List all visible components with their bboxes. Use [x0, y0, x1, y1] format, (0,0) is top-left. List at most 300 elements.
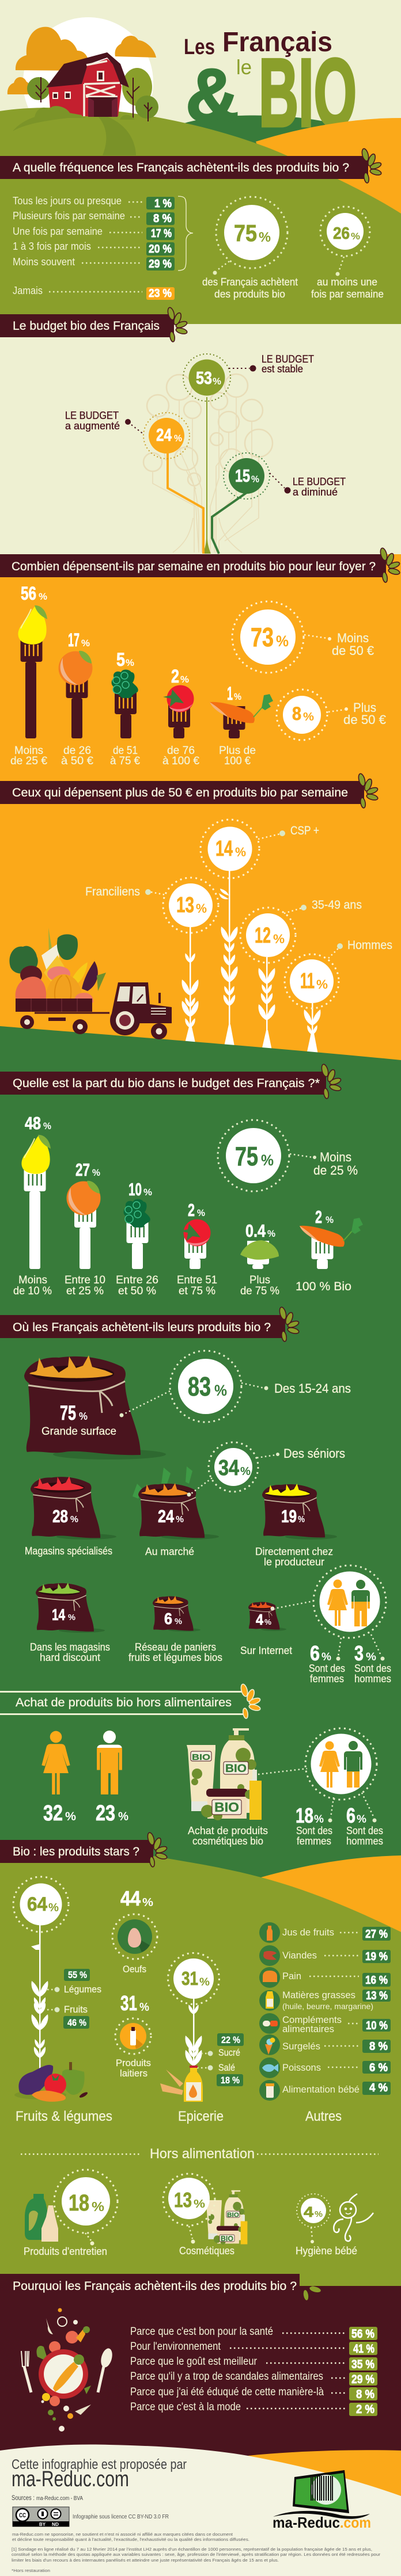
fork chart: over 75 percent: de 75 % [240, 1285, 279, 1297]
stat: cosmetics 13 percent: BIO [221, 2234, 233, 2243]
stat: grocery 31 percent [160, 1953, 244, 2124]
stat: 26 percent weekly: 26 [333, 224, 350, 243]
license badge: BY [39, 2522, 46, 2527]
stat: dairy 31 percent: laitiers [120, 2068, 147, 2079]
sack: direct from producer 19 percent: 19 [281, 1506, 297, 1526]
title: & [186, 53, 239, 137]
frequency list: Jamais [13, 285, 43, 296]
stat: internet buyers by gender: 3 [354, 1641, 364, 1665]
fork chart: 51 to 75 percent: % [197, 1207, 205, 1218]
license badge: ND [52, 2522, 59, 2527]
heading banner: frequency: A quelle fréquence les Français achètent-ils des produits bio ? [13, 161, 349, 174]
fork chart: over 75 percent: 0.4 [245, 1221, 266, 1241]
list: other products: (huile, beurre, margarine) [282, 2002, 373, 2011]
panel: weekly spend [0, 547, 400, 767]
frequency list: Moins souvent [13, 256, 75, 268]
stat: baby hygiene 4 percent: Hygiène bébé [296, 2245, 357, 2257]
stat: 8 percent over 50 euros: % [303, 711, 314, 723]
heading banner: weekly spend: Combien dépensent-ils par semaine en produits bio pour leur foyer ? [12, 560, 376, 573]
list: other products [259, 1922, 391, 2124]
list: reasons with percentages: Parce que c'est bon pour la santé [130, 2325, 273, 2338]
background: olive section [0, 1850, 401, 2286]
stat: fruits and vegetables 64 percent: 55 % [68, 1969, 87, 1980]
stat: 75 percent buy organic: % [259, 230, 271, 245]
fork chart: 26 to 50 euros: % [81, 638, 90, 649]
stat: grocery 31 percent: Epicerie [178, 2109, 224, 2124]
sack: supermarket 75 percent [24, 1355, 166, 1460]
fork chart: 76 to 100 euros: de 76 [167, 745, 195, 757]
stat: 13 percent Franciliens [85, 878, 218, 933]
heading banner: weekly spend [0, 547, 400, 583]
fork chart: 100 percent organic: 2 [315, 1207, 322, 1227]
disclaimer and sources: ma-Reduc.com ne sponsorise, ne soutient et n'est ni associé ni affilié aux marques citées dans ce document [12, 2532, 233, 2537]
stat: cosmetics buyers by gender: 18 [296, 1804, 313, 1827]
background: footer orange wedge [248, 2450, 401, 2501]
header illustration backdrop [7, 17, 156, 147]
fork chart: 10 to 25 percent: et 25 % [66, 1285, 104, 1297]
stat: 12 percent age 35-49 [240, 898, 362, 963]
fork chart: under 10 percent: de 10 % [13, 1285, 52, 1297]
list: other products: 16 % [365, 1974, 388, 1987]
stat: 83 percent age 15-24: Des 15-24 ans [274, 1381, 351, 1396]
illustration: organic cosmetics: BIO [192, 1752, 210, 1762]
title: le [236, 55, 252, 79]
stat: 24 percent increased: 24 [156, 425, 172, 445]
disclaimer and sources: [1] Sondage en ligne réalisé du 7 au 12 février 2014 par l'institut LH2 auprès d'un échantillon de 1000 personnes, représentatif de la population française âgée de 15 ans et plus, [12, 2547, 372, 2552]
stat: 15 percent decreased: % [251, 474, 259, 485]
fork chart: 51 to 75 percent: 2 [188, 1200, 195, 1220]
stat: 83 percent age 15-24: % [214, 1382, 227, 1399]
credit text: Sources : [12, 2494, 35, 2502]
stat: 8 percent over 50 euros: 8 [292, 703, 301, 724]
fork chart: 26 to 50 euros [59, 630, 93, 767]
stat: internet buyers by gender: % [321, 1651, 331, 1663]
stat: 14 percent CSP+: % [235, 845, 246, 859]
panel: reasons for buying [13, 2265, 377, 2432]
stat: 53 percent stable: LE BUDGET [262, 353, 314, 365]
list: reasons with percentages: Parce que c'est à la mode [130, 2400, 241, 2413]
frequency list: 29 % [149, 258, 172, 270]
sack: basket network 6 percent: Réseau de paniers [135, 1641, 216, 1653]
background: cream sky [0, 0, 401, 324]
stat: 14 percent CSP+ [200, 820, 319, 878]
list: reasons with percentages: 29 % [351, 2373, 374, 2386]
stat: internet buyers by gender: hommes [354, 1673, 391, 1685]
sack: internet 4 percent: % [264, 1617, 272, 1626]
stat: cleaning products 18 percent: Produits d'entretien [24, 2246, 107, 2257]
fork chart: 26 to 50 percent: Entre 26 [116, 1274, 158, 1286]
fork chart: over 100 euros: % [234, 691, 241, 702]
heading banner: budget share [0, 1064, 342, 1099]
stem: budget stable [203, 397, 211, 554]
sack: market 24 percent: % [176, 1515, 184, 1525]
fork chart: over 100 euros: 100 € [224, 755, 251, 767]
stat: 26 percent weekly [311, 207, 384, 300]
list: other products: Autres [305, 2109, 342, 2124]
list: reasons with percentages: 56 % [351, 2327, 374, 2341]
stat: dairy 31 percent [115, 1991, 151, 2079]
fork chart: 10 to 25 percent: % [92, 1167, 100, 1178]
stat: cosmetics 13 percent [163, 2174, 247, 2257]
stat: 13 percent Franciliens: % [196, 901, 207, 916]
list: other products: Surgelés [282, 2041, 320, 2052]
stat: baby hygiene 4 percent: % [315, 2209, 323, 2219]
illustration: organic cosmetics: cosmétiques bio [192, 1835, 263, 1847]
stat: 75 percent under 25 percent [218, 1120, 358, 1191]
stat: 15 percent decreased: 15 [235, 466, 250, 486]
stat: eggs 44 percent: 44 [120, 1887, 141, 1910]
list: reasons with percentages: Parce que le goût est meilleur [130, 2355, 257, 2368]
background: orange wedge [261, 1855, 401, 1957]
stat: 75 percent buy organic: des produits bio [214, 288, 285, 300]
stat: cosmetics 13 percent: % [194, 2198, 205, 2211]
stat: cosmetics buyers by gender: hommes [346, 1835, 383, 1847]
list: other products: Compléments [282, 2015, 342, 2025]
credit text: Cette infographie est proposée par [12, 2457, 187, 2472]
stat: 14 percent CSP+: 14 [215, 837, 233, 861]
heading banner: reasons: Pourquoi les Français achètent-ils des produits bio ? [13, 2280, 297, 2293]
illustration: tractor with vegetables [9, 928, 172, 1039]
stat: 15 percent decreased: a diminué [293, 486, 338, 498]
sack: specialist shops 28 percent [25, 1476, 116, 1557]
sack: hard discount 14 percent: hard discount [40, 1652, 100, 1663]
fork chart: under 25 euros [10, 583, 47, 767]
sack: market 24 percent: Au marché [145, 1546, 194, 1557]
list: other products: 13 % [366, 1990, 388, 2002]
sack: hard discount 14 percent [30, 1583, 110, 1663]
stat: 75 percent under 25 percent: % [261, 1152, 274, 1169]
fork chart: 26 to 50 percent: 10 [128, 1179, 142, 1199]
stat: grocery 31 percent: 31 [181, 1968, 198, 1989]
fork chart: 26 to 50 euros: 17 [68, 630, 80, 650]
fork chart: 100 percent organic: 100 % Bio [296, 1280, 351, 1293]
flower stems [182, 871, 320, 1055]
license badge: CC [19, 2512, 26, 2519]
sack: hard discount 14 percent: Dans les magasins [30, 1641, 110, 1653]
sack: direct from producer 19 percent: le producteur [264, 1556, 324, 1568]
stat: internet buyers by gender: femmes [310, 1673, 344, 1685]
stat: women 32 percent: 32 [43, 1801, 63, 1826]
panel: footer credits [12, 2457, 381, 2573]
list: other products: Poissons [282, 2063, 321, 2073]
sack: internet 4 percent: Sur Internet [240, 1645, 292, 1656]
stat: 53 percent stable: % [213, 376, 221, 387]
heading banner: budget share: Quelle est la part du bio dans le budget des Français ?* [13, 1077, 320, 1090]
stat: grocery 31 percent: Salé [218, 2062, 235, 2073]
fork chart: under 25 euros: 56 [21, 583, 36, 604]
list: reasons with percentages: 8 % [356, 2388, 374, 2401]
title [184, 27, 357, 150]
fork chart: 51 to 75 euros: à 75 € [110, 755, 140, 767]
illustration: organic cosmetics [187, 1728, 268, 1847]
background: orange section [0, 554, 401, 1061]
stat: dairy 31 percent: Produits [116, 2057, 151, 2068]
heading banner: reasons [13, 2265, 321, 2301]
list: other products: 6 % [369, 2061, 388, 2074]
stat: 11 percent men [285, 939, 392, 1008]
stat: 26 percent weekly: au moins une [317, 276, 377, 288]
stat: 26 percent weekly: % [351, 231, 360, 242]
fork chart: 100 percent organic: % [326, 1214, 334, 1225]
list: reasons with percentages [130, 2325, 377, 2416]
list: reasons with percentages: 2 % [356, 2403, 374, 2416]
sack: basket network 6 percent: 6 [164, 1610, 172, 1628]
stat: 53 percent stable: 53 [196, 368, 212, 388]
stat: grocery 31 percent: 22 % [221, 2034, 240, 2045]
stat: fruits and vegetables 64 percent [13, 1877, 112, 2124]
pale tree background [143, 374, 273, 552]
stat: internet buyers by gender: 6 [310, 1641, 320, 1665]
fork chart: 26 to 50 euros: à 50 € [61, 755, 93, 767]
stat: 75 percent buy organic [202, 197, 298, 300]
heading banner: heavy spenders: Ceux qui dépensent plus de 50 € en produits bio par semaine [12, 786, 348, 799]
list: reasons with percentages: Parce qu'il y a trop de scandales alimentaires [130, 2370, 323, 2383]
stat: 15 percent decreased: LE BUDGET [293, 476, 346, 487]
heading banner: frequency [0, 148, 382, 184]
heading banner: budget: Le budget bio des Français [13, 319, 160, 333]
sack: direct from producer 19 percent: Directement chez [255, 1546, 333, 1557]
heading banner: heavy spenders [0, 773, 379, 809]
list: other products: alimentaires [282, 2024, 334, 2034]
stat: 34 percent seniors: Des séniors [283, 1446, 345, 1461]
background: maroon section [0, 2274, 401, 2501]
stat: cleaning products 18 percent [24, 2170, 118, 2257]
stat: 73 percent under 50 euros: Moins [337, 631, 369, 645]
fork chart: 76 to 100 euros: 2 [171, 666, 179, 687]
panel: purchase frequency [0, 148, 384, 300]
stat: internet buyers by gender: Sont des [309, 1663, 345, 1674]
stat: fruits and vegetables 64 percent: Légumes [64, 1984, 101, 1995]
heading banner: star products: Bio : les produits stars ? [13, 1845, 139, 1858]
illustration: plate with vegetables [21, 2308, 114, 2432]
stat: fruits and vegetables 64 percent: Fruits [64, 2004, 88, 2015]
stat: fruits and vegetables 64 percent: Fruits & légumes [16, 2109, 112, 2124]
sack: basket network 6 percent: fruits et légumes bios [128, 1652, 222, 1663]
list: other products: Alimentation bébé [282, 2085, 360, 2095]
frequency list: 1 à 3 fois par mois [13, 241, 91, 252]
fork chart: 26 to 50 percent: % [143, 1187, 152, 1198]
fork chart: over 100 euros: Plus de [219, 745, 256, 757]
stat: men 23 percent: % [118, 1810, 128, 1823]
sack: market 24 percent: 24 [158, 1506, 175, 1526]
stat: 83 percent age 15-24: 83 [188, 1371, 211, 1401]
background: budget cream band [0, 324, 401, 554]
list: reasons with percentages: 41 % [353, 2342, 374, 2356]
stat: eggs 44 percent: % [142, 1896, 153, 1909]
stat: cosmetics buyers by gender: Sont des [346, 1825, 383, 1836]
illustration: organic cosmetics: BIO [225, 1763, 247, 1775]
stat: fruits and vegetables 64 percent: 46 % [67, 2017, 86, 2028]
stat: cosmetics buyers by gender: 6 [346, 1804, 355, 1827]
sack: internet 4 percent [240, 1602, 292, 1656]
fork chart: 51 to 75 percent [177, 1200, 217, 1297]
stat: 75 percent under 25 percent: Moins [320, 1150, 351, 1164]
credit text: ma-Reduc.com [12, 2467, 129, 2491]
sack: specialist shops 28 percent: % [70, 1515, 78, 1525]
stat: eggs 44 percent: Oeufs [123, 1964, 146, 1975]
list: other products: 19 % [365, 1950, 388, 1963]
logo: ma-Reduc: .com [340, 2514, 371, 2531]
credit text [12, 2457, 187, 2502]
stat: cosmetics buyers by gender: Sont des [296, 1825, 332, 1836]
sack: direct from producer 19 percent: % [298, 1515, 305, 1525]
disclaimer and sources: et décline toute responsabilité quant à l'actualité, l'exactitude, l'exhaustivité ou la qualité des informations diffusées. [12, 2537, 249, 2542]
frequency list: 17 % [151, 227, 172, 240]
stat: women 32 percent: % [65, 1810, 76, 1823]
panel: where they buy [0, 1306, 391, 1685]
fork chart: 26 to 50 percent: et 50 % [118, 1285, 156, 1297]
stem: budget decreased [212, 493, 247, 554]
sack: supermarket 75 percent: % [79, 1411, 88, 1422]
stat: 73 percent under 50 euros: % [276, 632, 289, 650]
stat: cosmetics 13 percent: 13 [174, 2188, 192, 2212]
stat: 53 percent stable [183, 353, 314, 401]
stat: 8 percent over 50 euros [277, 689, 386, 740]
stat: 34 percent seniors: % [240, 1465, 251, 1478]
stat: men 23 percent [96, 1731, 128, 1826]
frequency list: 23 % [149, 287, 172, 300]
stat: 11 percent men: Hommes [347, 939, 392, 952]
panel: heavy spenders [0, 773, 392, 1055]
panel: organic budget share [0, 1064, 363, 1297]
illustration: organic cosmetics: BIO [214, 1800, 239, 1815]
stat: 75 percent under 25 percent: 75 [235, 1141, 258, 1171]
heading banner: non-food: Achat de produits bio hors alimentaires [16, 1696, 232, 1709]
background: orange hill [256, 118, 401, 230]
stat: grocery 31 percent: % [199, 1976, 210, 1988]
frequency list: Tous les jours ou presque [13, 195, 122, 207]
stat: 14 percent CSP+: CSP + [290, 824, 319, 837]
stat: internet buyers by gender [271, 1565, 391, 1685]
stat: dairy 31 percent: 31 [120, 1991, 137, 2015]
stat: 34 percent seniors [187, 1442, 345, 1496]
heading banner: star products [0, 1832, 168, 1868]
illustration: organic cosmetics: Achat de produits [188, 1825, 268, 1836]
fork chart: 10 to 25 percent: 27 [75, 1160, 90, 1180]
subheading: non-food: Hors alimentation [150, 2146, 255, 2162]
list: other products: 4 % [369, 2082, 388, 2094]
sack: hard discount 14 percent: 14 [52, 1606, 65, 1624]
frequency list: 20 % [149, 243, 172, 256]
disclaimer and sources [12, 2532, 381, 2573]
list: reasons with percentages: 35 % [351, 2358, 374, 2371]
fork chart: 51 to 75 euros [110, 649, 140, 767]
stat: 15 percent decreased [224, 453, 346, 499]
fork chart: under 10 percent [13, 1113, 52, 1297]
stat: cosmetics buyers by gender [258, 1728, 383, 1847]
frequency list: 1 % [154, 197, 172, 210]
list: other products: Jus de fruits [282, 1927, 334, 1938]
disclaimer and sources: *Hors restauration [12, 2568, 50, 2573]
stat: 73 percent under 50 euros: 73 [251, 622, 274, 652]
stat: 26 percent weekly: fois par semaine [311, 288, 384, 300]
list: other products: Pain [282, 1971, 301, 1981]
sack: specialist shops 28 percent: Magasins spécialisés [25, 1545, 112, 1557]
panel: budget tree [0, 307, 346, 554]
stat: cosmetics 13 percent: Cosmétiques [179, 2245, 234, 2257]
frequency list: Plusieurs fois par semaine [13, 210, 125, 222]
stat: 24 percent increased: a augmenté [65, 420, 120, 432]
list: other products: 8 % [369, 2040, 388, 2053]
fork chart: over 75 percent: % [267, 1228, 275, 1239]
stat: cleaning products 18 percent: % [92, 2199, 104, 2214]
fork chart: 26 to 50 euros: de 26 [63, 745, 91, 757]
stat: eggs 44 percent [112, 1887, 157, 1975]
disclaimer and sources: limiter les biais d'un recours à des internautes panélisés et atteindre une juste représentativité des Français âgés de 15 ans et plus. [12, 2558, 279, 2563]
stat: 24 percent increased: % [174, 433, 182, 444]
stat: 73 percent under 50 euros: de 50 € [332, 643, 374, 658]
stat: cleaning products 18 percent: 18 [69, 2190, 89, 2216]
frequency list: Une fois par semaine [13, 226, 103, 237]
frequency list [13, 195, 193, 300]
stat: 13 percent Franciliens: 13 [176, 893, 194, 917]
stat: 34 percent seniors: 34 [218, 1456, 239, 1480]
stat: 8 percent over 50 euros: de 50 € [343, 712, 386, 727]
stat: baby hygiene 4 percent [296, 2194, 373, 2257]
logo: ma-Reduc [273, 2470, 371, 2531]
frequency list: 8 % [153, 212, 172, 225]
fork chart: under 10 percent: Moins [18, 1274, 47, 1286]
fork chart: under 25 euros: Moins [14, 745, 43, 757]
panel: star products [0, 1832, 391, 2257]
fork chart: 51 to 75 euros: de 51 [113, 745, 138, 757]
title: Français [222, 27, 332, 58]
stat: internet buyers by gender: Sont des [354, 1663, 391, 1674]
sack: specialist shops 28 percent: 28 [52, 1506, 68, 1526]
fork chart: 10 to 25 percent: Entre 10 [65, 1274, 105, 1286]
fork chart: 51 to 75 euros: 5 [116, 649, 125, 670]
fork chart: over 100 euros: 1 [227, 683, 233, 704]
panel: non-food purchases [0, 1683, 383, 1847]
heading banner: non-food [0, 1683, 261, 1719]
stat: 83 percent age 15-24 [120, 1351, 351, 1422]
fork chart: 51 to 75 euros: % [126, 657, 134, 668]
fork chart: under 10 percent: 48 [25, 1113, 41, 1133]
list: reasons with percentages: Pour l'environnement [130, 2340, 221, 2353]
license badge: Infographie sous licence CC BY-ND 3.0 FR [73, 2514, 169, 2520]
fork chart: 51 to 75 percent: Entre 51 [177, 1274, 217, 1286]
stat: 53 percent stable: est stable [262, 363, 303, 375]
license badge [13, 2507, 169, 2527]
stat: 11 percent men: % [316, 977, 328, 992]
background: olive hill [0, 108, 401, 324]
fork chart: under 10 percent: % [43, 1121, 51, 1131]
sack: basket network 6 percent: % [175, 1617, 182, 1626]
fork chart: over 100 euros [210, 683, 273, 767]
title: Les [184, 35, 215, 59]
fork chart: 10 to 25 percent [65, 1160, 105, 1297]
heading banner: where they buy [0, 1306, 300, 1342]
stat: 75 percent under 25 percent: de 25 % [313, 1163, 358, 1178]
stat: 13 percent Franciliens: Franciliens [85, 885, 140, 898]
list: reasons with percentages: Parce que j'ai été éduqué de cette manière-là [130, 2386, 324, 2398]
fork chart: 76 to 100 euros [162, 666, 199, 767]
list: other products: 27 % [365, 1928, 388, 1941]
stat: cosmetics buyers by gender: femmes [297, 1835, 331, 1847]
stat: cosmetics 13 percent: BIO [227, 2212, 239, 2219]
sack: market 24 percent [133, 1466, 219, 1557]
stat: 12 percent age 35-49: 12 [255, 924, 271, 948]
fork chart: 26 to 50 percent [116, 1179, 158, 1297]
stat: 75 percent buy organic: 75 [234, 220, 257, 246]
fork chart: 51 to 75 percent: et 75 % [179, 1285, 215, 1297]
stat: cosmetics buyers by gender: % [314, 1813, 324, 1826]
stat: men 23 percent: 23 [96, 1801, 115, 1826]
heading banner: where they buy: Où les Français achètent-ils leurs produits bio ? [13, 1321, 271, 1334]
fork chart: under 25 euros: % [39, 591, 47, 602]
illustration: barn with trees [13, 52, 158, 155]
stat: 75 percent buy organic: des Français achètent [202, 276, 298, 288]
